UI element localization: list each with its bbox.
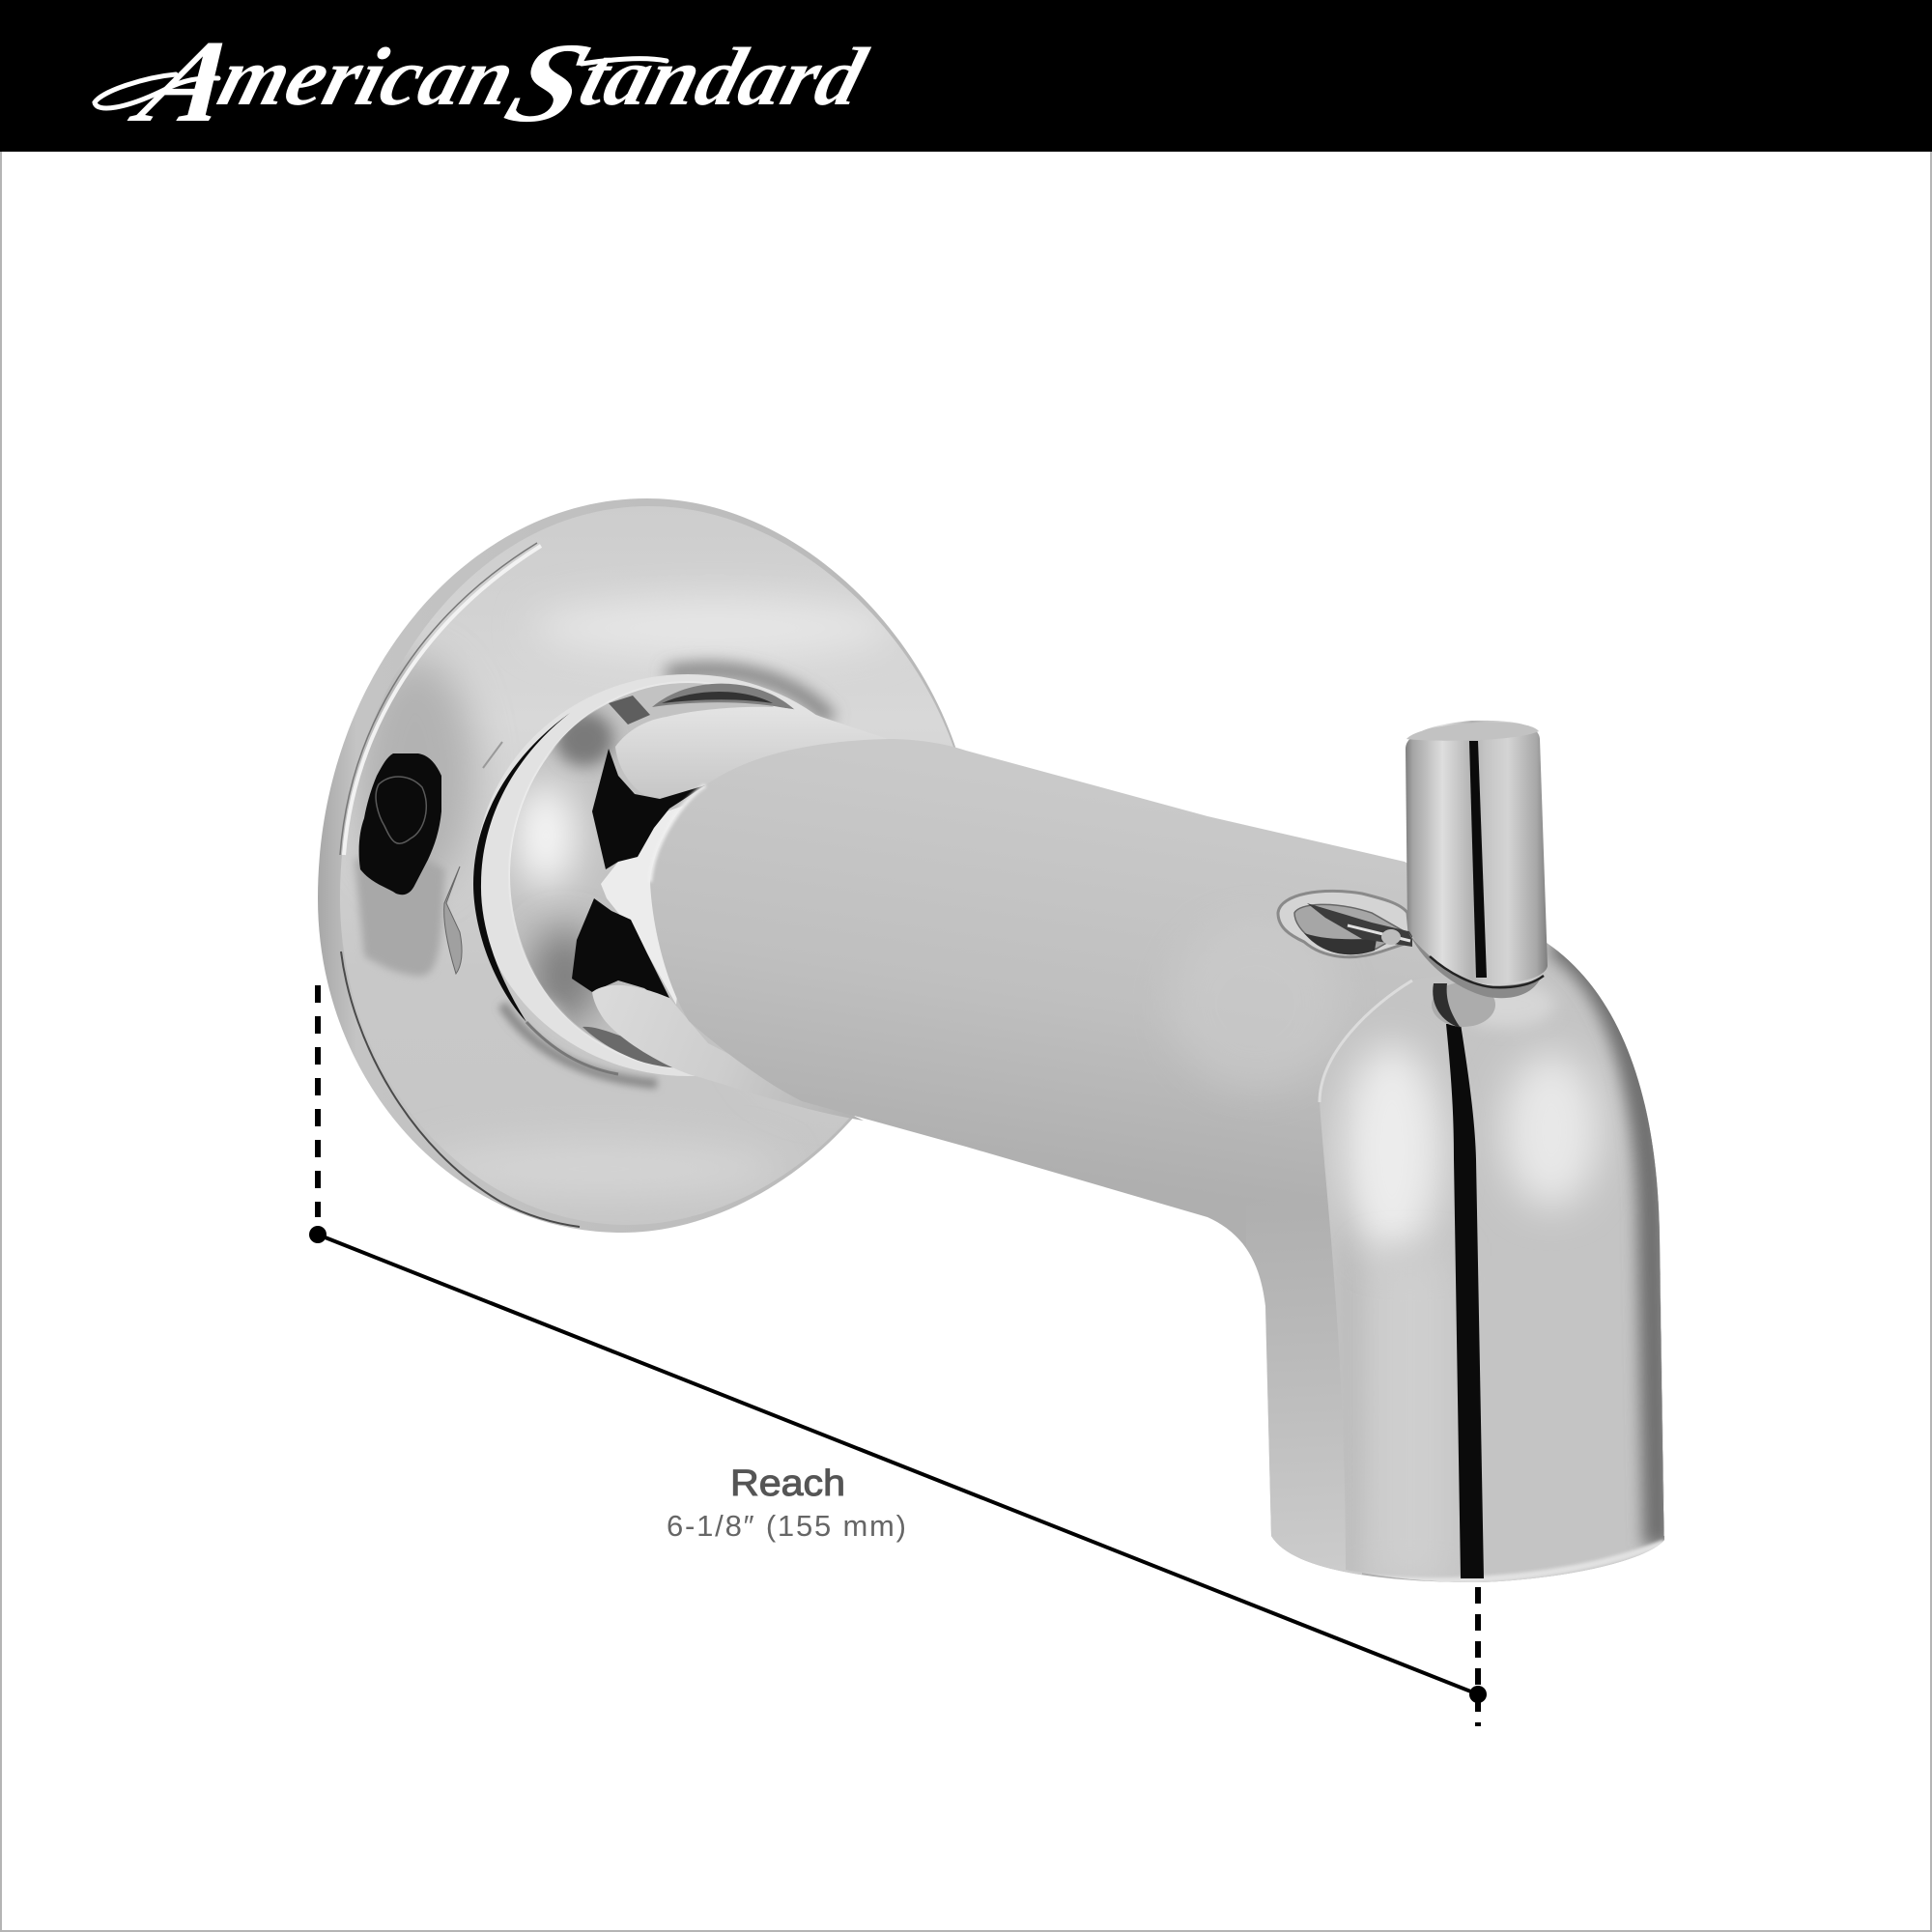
knob top face [1406, 723, 1539, 741]
left end dot [309, 1226, 327, 1243]
reach label: Reach [730, 1463, 845, 1504]
spout arm and drop [650, 739, 1664, 1594]
diverter pin base [1432, 982, 1495, 1028]
product: tub spout [318, 498, 1666, 1604]
reflection lens [444, 867, 462, 974]
diverter hole and lever [1278, 891, 1412, 957]
reach value: 6-1/8″ (155 mm) [667, 1509, 906, 1543]
dimension: reach [309, 985, 1487, 1726]
reach label [667, 1463, 906, 1543]
logo wordmark [95, 15, 876, 147]
flange edge lines [341, 952, 580, 1227]
header bar with logo [0, 0, 1932, 152]
right dashed extension line [1475, 1587, 1481, 1726]
reflection in spot [376, 777, 426, 843]
arm end edge highlight [650, 785, 705, 882]
dimension line [318, 1235, 1478, 1694]
spout front body [1320, 942, 1666, 1604]
left dashed extension line [315, 985, 321, 1217]
black reflection stripe [1446, 1024, 1484, 1578]
knob lip [1408, 932, 1540, 998]
logo wordmark: A [115, 15, 261, 147]
neck bright X [601, 802, 696, 1005]
knob underside line [1430, 956, 1544, 987]
reflection: dark spot [359, 753, 441, 895]
upper light lobe [615, 707, 891, 799]
lower black reflection [572, 898, 676, 1009]
logo wordmark: merican [209, 31, 526, 123]
logo wordmark: S [491, 19, 607, 146]
top groove [652, 684, 795, 710]
collar black crescent [473, 713, 570, 1022]
escutcheon collar [473, 669, 900, 1121]
upper black reflection [592, 749, 705, 869]
logo wordmark: tandard [570, 31, 876, 123]
right edge shading [1555, 942, 1658, 1546]
lower groove [582, 1026, 673, 1068]
diverter knob [1406, 721, 1548, 998]
wall flange [318, 498, 966, 1233]
right end dot [1469, 1686, 1487, 1703]
lower light lobe [592, 985, 864, 1121]
small fitting [609, 696, 650, 724]
knob stripe [1469, 741, 1487, 978]
